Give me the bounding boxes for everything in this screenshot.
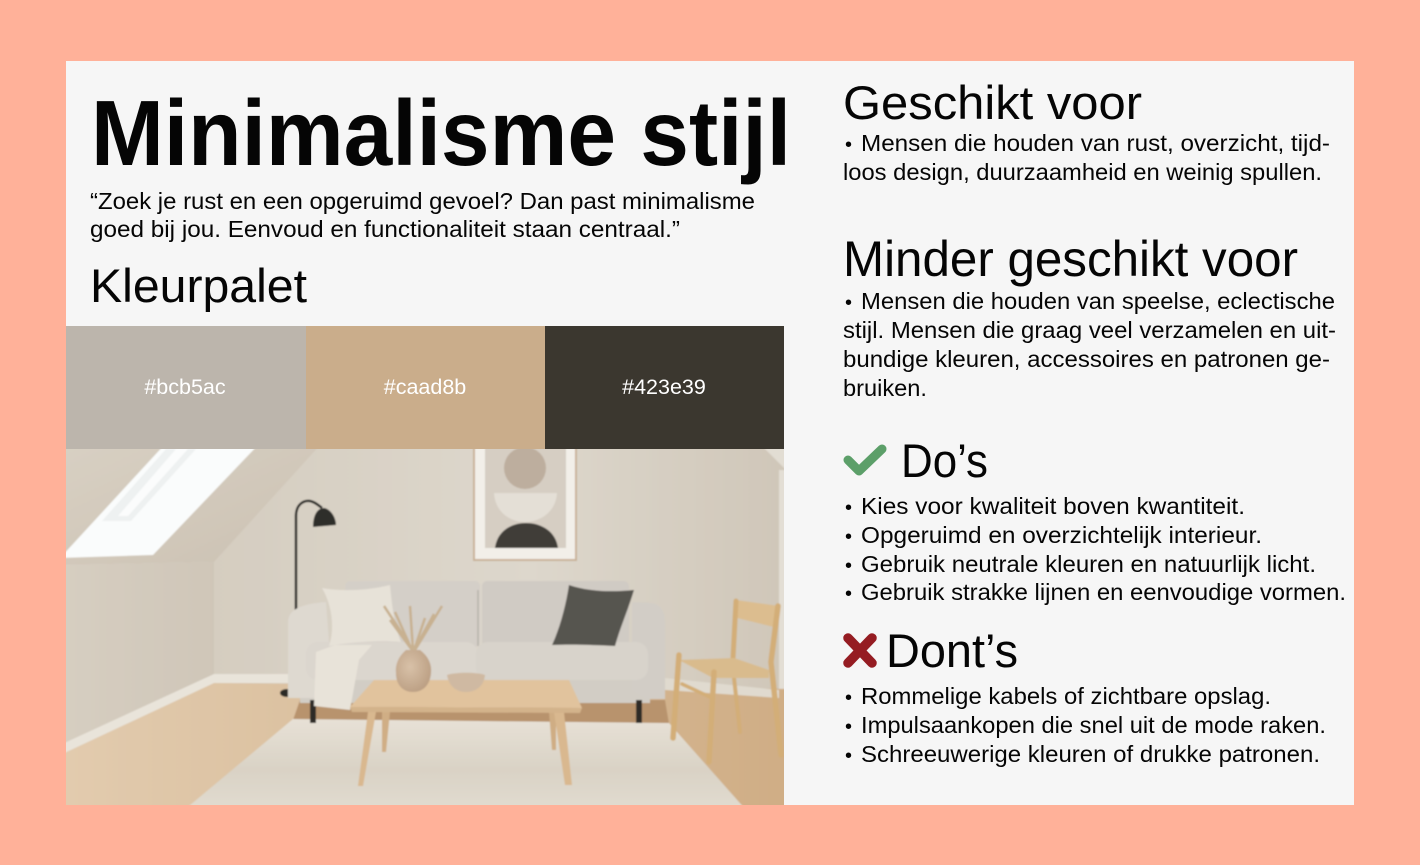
rug [183, 719, 747, 811]
vase with dried grass [384, 606, 442, 692]
list: Do's: • [845, 555, 852, 577]
heading: Geschikt voor: Geschikt voor [843, 76, 1142, 129]
intro quote [90, 188, 755, 242]
text: Minder geschikt voor [843, 288, 1336, 401]
text: Geschikt voor: Mensen die houden van rust, overzicht, tijd- [861, 130, 1330, 156]
title: Minimalisme stijl [91, 81, 791, 185]
floor lamp [280, 501, 336, 697]
swatch: #423e39: #423e39 [622, 375, 706, 399]
text: Geschikt voor [843, 130, 1330, 185]
wall art [473, 443, 577, 561]
swatch: #423e39 [545, 326, 784, 449]
heading: Minder geschikt voor: Minder geschikt voor [843, 231, 1298, 287]
colour palette [66, 326, 784, 449]
sofa [288, 581, 665, 723]
chair [673, 600, 781, 762]
list: Do's: Kies voor kwaliteit boven kwantiteit. [861, 493, 1245, 519]
list: Do's: • [845, 526, 852, 548]
list: Dont's: • [845, 745, 852, 767]
list: Dont's: • [845, 687, 852, 709]
list: Dont's: Impulsaankopen die snel uit de mode raken. [861, 712, 1326, 738]
heading: Dont's: Dont’s [886, 624, 1018, 677]
text: Minder geschikt voor: • [845, 292, 852, 314]
list: Do's: • [845, 497, 852, 519]
list: Do's: Opgeruimd en overzichtelijk interieur. [861, 522, 1262, 548]
text: Geschikt voor: loos design, duurzaamheid en weinig spullen. [843, 159, 1322, 185]
list: Dont's: Schreeuwerige kleuren of drukke patronen. [861, 741, 1320, 767]
heading: Do's: Do’s [901, 434, 988, 487]
list: Dont's: • [845, 716, 852, 738]
intro quote: goed bij jou. Eenvoud en functionaliteit staan centraal.” [90, 216, 680, 242]
swatch: #bcb5ac [66, 326, 306, 449]
text: Minder geschikt voor: bruiken. [843, 375, 927, 401]
list: Do's: Gebruik neutrale kleuren en natuurlijk licht. [861, 551, 1316, 577]
text: Minder geschikt voor: stijl. Mensen die graag veel verzamelen en uit- [843, 317, 1336, 343]
coffee table [350, 680, 582, 786]
swatch: #bcb5ac: #bcb5ac [144, 375, 226, 399]
intro quote: “Zoek je rust en een opgeruimd gevoel? Dan past minimalisme [90, 188, 755, 214]
pillow: dark [552, 585, 634, 646]
icon: cross mark [848, 638, 872, 663]
text: Minder geschikt voor: bundige kleuren, accessoires en patronen ge- [843, 346, 1330, 372]
pillow: cream [322, 585, 401, 646]
text: Minder geschikt voor: Mensen die houden van speelse, eclectische [861, 288, 1335, 314]
swatch: #caad8b: #caad8b [384, 375, 466, 399]
list: Do's: Gebruik strakke lijnen en eenvoudige vormen. [861, 579, 1346, 605]
text: Geschikt voor: • [845, 134, 852, 156]
bowl [447, 673, 485, 692]
list: Dont's: Rommelige kabels of zichtbare opslag. [861, 683, 1271, 709]
list: Dont's [845, 683, 1326, 767]
list: Do's: • [845, 583, 852, 605]
icon: check mark [848, 449, 882, 471]
interior photo illustration [60, 443, 790, 811]
list: Do's [845, 493, 1346, 605]
heading: Kleurpalet: Kleurpalet [90, 259, 307, 312]
content panel [66, 61, 1354, 805]
throw blanket [314, 645, 372, 710]
swatch: #caad8b [306, 326, 545, 449]
